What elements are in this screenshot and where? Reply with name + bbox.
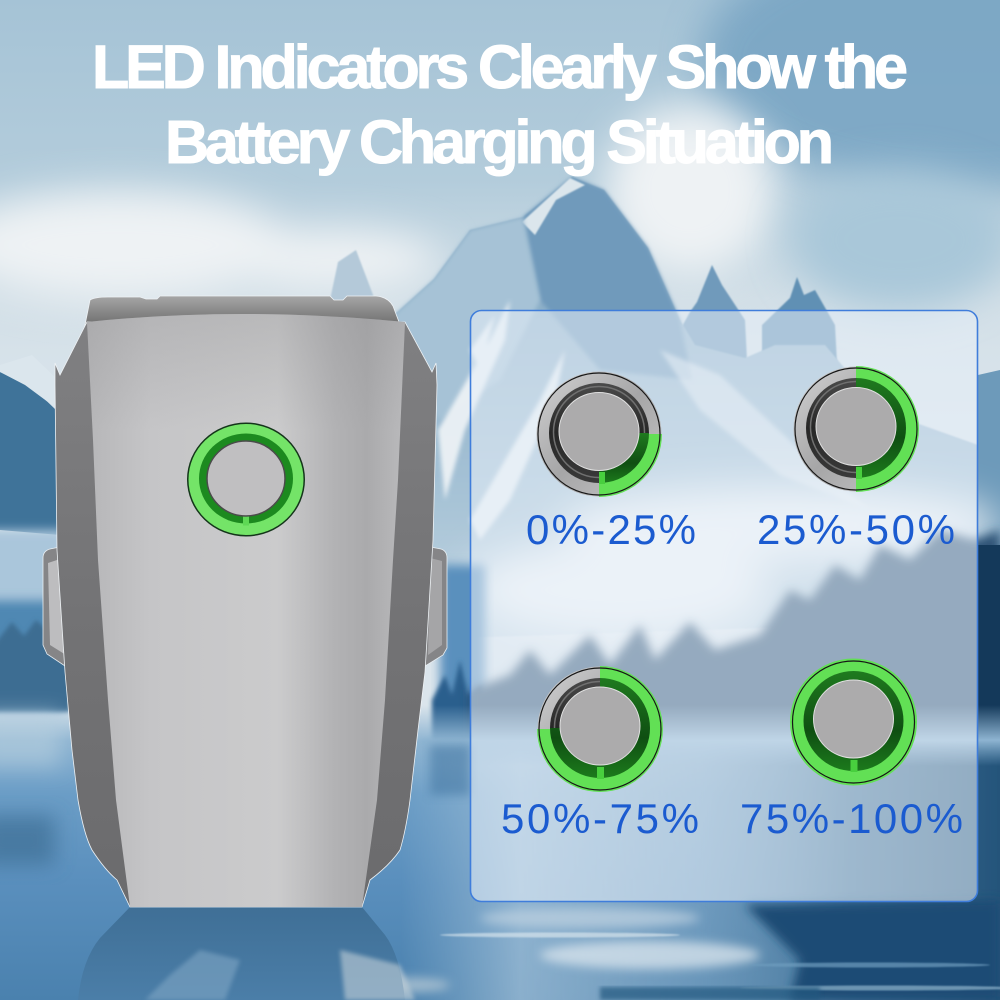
battery (43, 296, 447, 907)
top cap (84, 296, 402, 330)
indicator: 50%-75% (537, 666, 663, 792)
indicator: 0%-25% (536, 372, 662, 497)
indicator: 25%-50% (794, 366, 919, 492)
title (92, 33, 908, 176)
front panel (87, 314, 405, 907)
left and centre mist (0, 530, 65, 605)
far peaks (330, 250, 840, 420)
snow streaks (438, 300, 870, 540)
forest silhouette (0, 620, 70, 712)
right side tab (422, 546, 447, 668)
label: 75%-100%: 75%-100% (740, 795, 963, 842)
dark ripples (440, 932, 1000, 990)
body sides (55, 322, 437, 907)
peak snow (522, 178, 585, 235)
right sky blue (790, 170, 1000, 310)
title line 1: LED Indicators Clearly Show the (92, 33, 908, 101)
clouds upper (0, 105, 775, 300)
light ripples (350, 908, 760, 993)
label: 50%-75%: 50%-75% (501, 795, 699, 842)
indicator: 75%-100% (790, 658, 917, 786)
main mountain (374, 177, 1000, 640)
right mountain (978, 370, 1000, 545)
label: 25%-50%: 25%-50% (757, 506, 955, 553)
dark north face (523, 177, 692, 380)
water (0, 705, 1000, 1000)
LED ring: battery (187, 422, 305, 536)
label: 0%-25%: 0%-25% (526, 506, 696, 553)
upper-right sky tint (700, 0, 1000, 190)
lit ridge (374, 217, 540, 420)
dark shore reflection (745, 900, 1000, 1000)
battery reflection (78, 907, 415, 1000)
left side tab (43, 546, 68, 668)
front top shade (87, 314, 405, 430)
title line 2: Battery Charging Situation (165, 108, 834, 176)
panel: charge levels (470, 310, 978, 902)
left dark mountain (0, 372, 60, 535)
low mist clouds (470, 487, 1000, 640)
